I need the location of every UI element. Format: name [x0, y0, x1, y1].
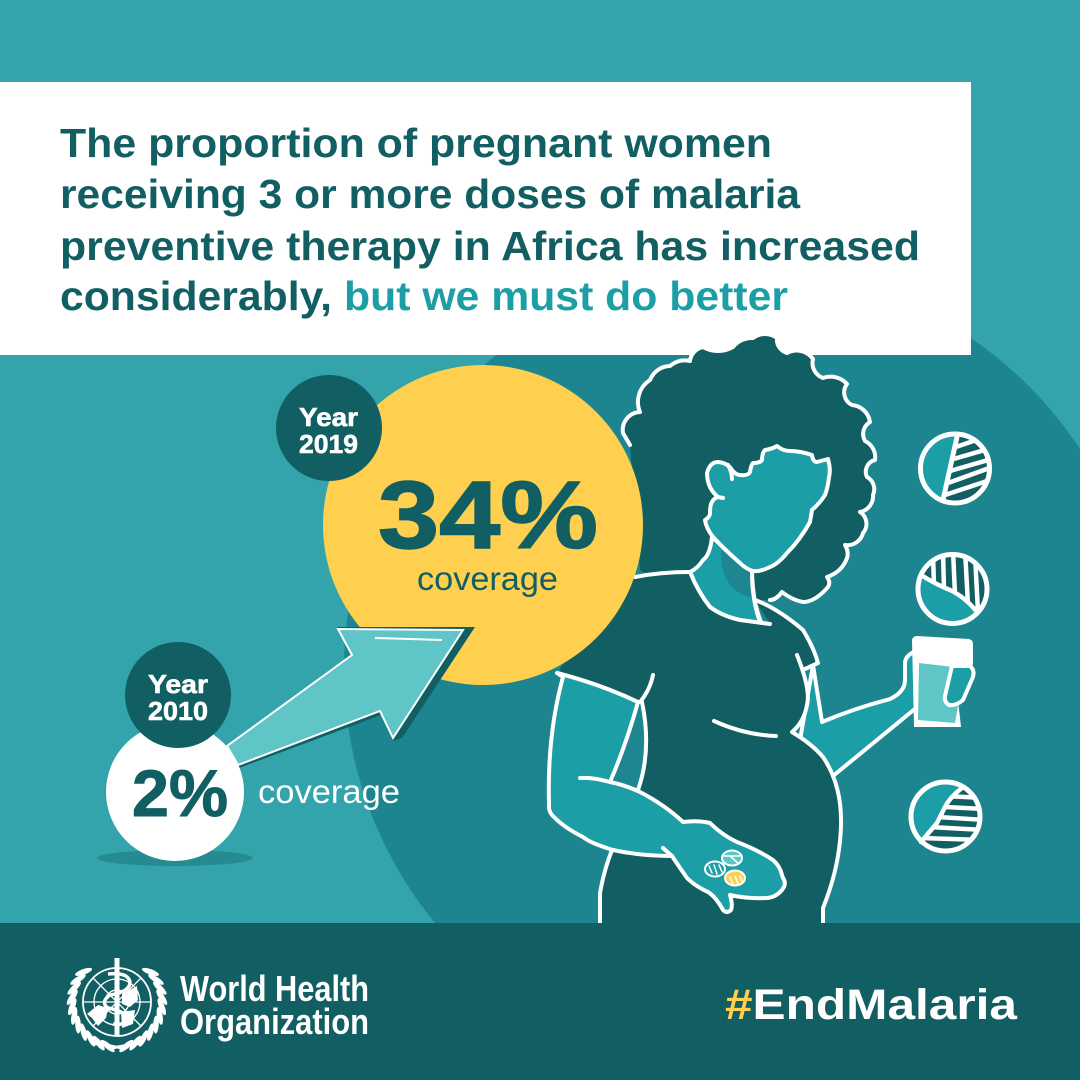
title: The proportion of pregnant women — [60, 120, 772, 166]
WHO wordmark — [180, 968, 369, 1042]
WHO wordmark: Organization — [180, 1001, 369, 1042]
arm details — [580, 675, 672, 856]
2010 coverage circle: 2% — [132, 756, 228, 830]
title: receiving 3 or more doses of malaria — [60, 171, 801, 217]
neck shadow — [721, 550, 752, 598]
sleeve gap — [610, 703, 647, 790]
2010 coverage label: coverage — [258, 773, 400, 810]
header panel — [0, 82, 971, 355]
title — [60, 120, 920, 319]
year 2010 badge — [125, 642, 231, 748]
footer band — [0, 923, 1080, 1080]
year 2019 badge: 2019 — [299, 429, 358, 459]
2010 coverage circle — [97, 723, 253, 866]
glass — [912, 636, 974, 727]
background large circle — [344, 268, 1080, 923]
pie icon 2 — [918, 550, 987, 624]
face — [705, 446, 830, 571]
year 2019 badge — [276, 375, 382, 481]
hair — [623, 334, 875, 610]
neck — [690, 537, 762, 624]
dress outlines — [600, 572, 841, 923]
pie icon 3 — [910, 782, 985, 851]
staff and serpent — [114, 958, 120, 1035]
title: but we must do better — [344, 273, 788, 319]
globe grid — [83, 968, 151, 1036]
WHO wordmark: World Health — [180, 968, 369, 1009]
continents — [87, 986, 138, 1028]
left arm with hand — [549, 673, 785, 912]
growth arrow — [227, 627, 475, 768]
2019 coverage circle: 34% — [378, 462, 598, 569]
year 2010 badge: Year — [148, 669, 208, 699]
hashtag: #EndMalaria — [725, 981, 1018, 1029]
2019 coverage circle — [323, 365, 643, 685]
title: considerably, — [60, 273, 332, 319]
illustration: pregnant woman — [549, 334, 974, 923]
right arm holding glass — [800, 651, 916, 776]
dress body — [560, 572, 841, 923]
WHO emblem — [65, 958, 169, 1054]
title: preventive therapy in Africa has increased — [60, 223, 920, 269]
2019 coverage circle: coverage — [417, 560, 558, 597]
pie icon 1 — [920, 434, 995, 503]
year 2019 badge: Year — [299, 402, 358, 432]
laurel wreath — [65, 966, 169, 1054]
year 2010 badge: 2010 — [148, 696, 208, 726]
pills in hand — [705, 850, 745, 886]
ear details — [718, 465, 732, 498]
